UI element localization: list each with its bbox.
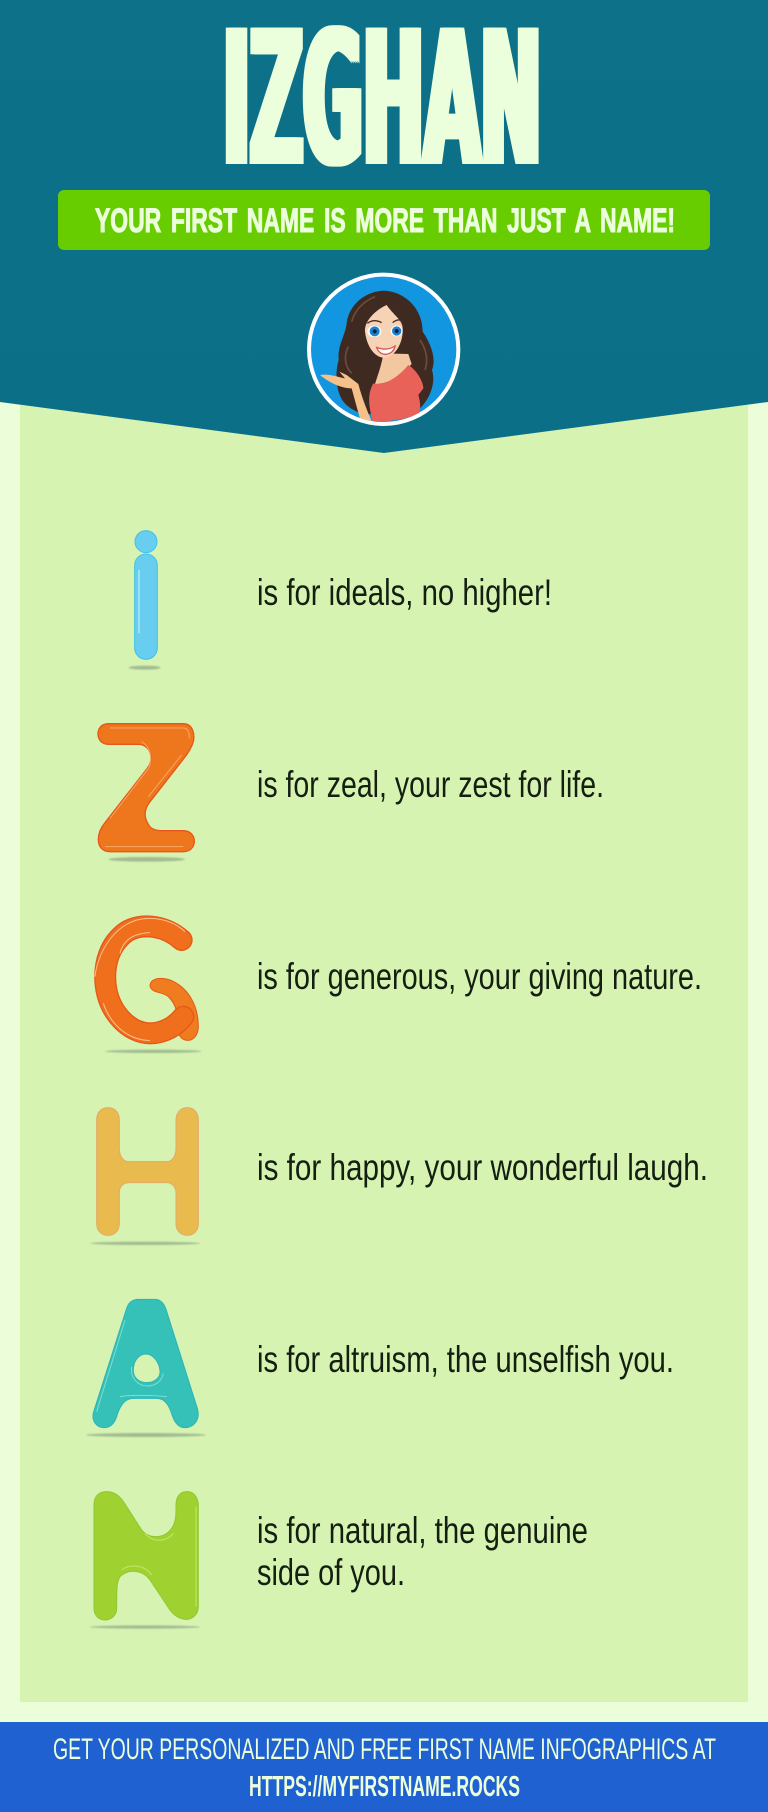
panel: letters: [20, 400, 748, 1702]
footer bar: [0, 1722, 768, 1812]
text: N line: side of you.: [257, 1552, 405, 1593]
text: Z line: is for zeal, your zest for life.: [257, 764, 604, 805]
letter I: [129, 531, 161, 670]
letter H: [90, 1108, 200, 1245]
avatar: woman in circle: [307, 273, 460, 426]
footer bar: HTTPS://MYFIRSTNAME.ROCKS: [249, 1771, 520, 1803]
letter N: [90, 1492, 200, 1629]
header chevron background: [0, 0, 768, 453]
letter G: [95, 918, 202, 1053]
text: N line: is for natural, the genuine: [257, 1510, 588, 1551]
text: I line: is for ideals, no higher!: [257, 572, 552, 613]
letter Z: [98, 724, 194, 862]
subtitle banner: [58, 190, 710, 250]
letter A: [86, 1299, 206, 1437]
